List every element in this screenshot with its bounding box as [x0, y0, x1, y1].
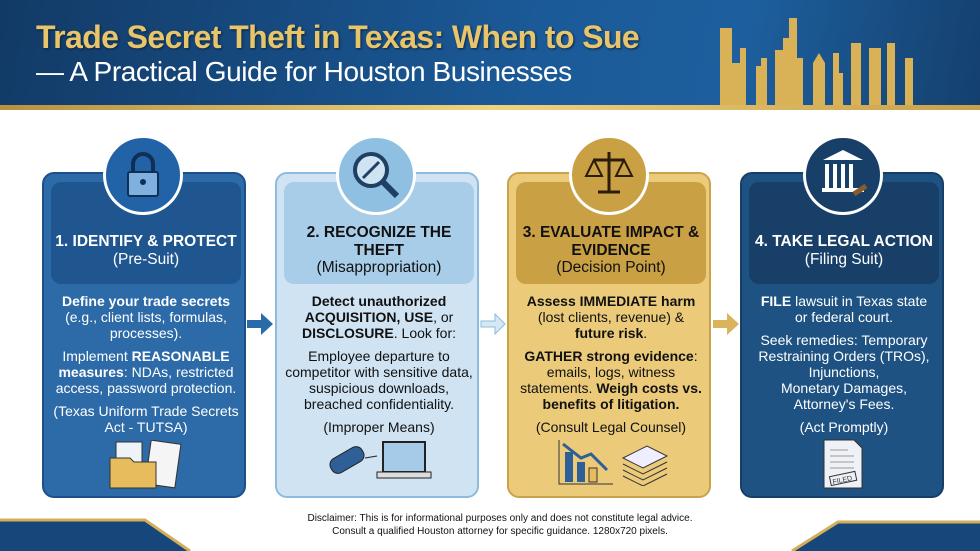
step 2 heading: (Misappropriation) [317, 259, 441, 276]
panel: step 1 [42, 172, 246, 498]
step 4 heading [749, 182, 939, 284]
step 1 text [53, 293, 239, 435]
bottom decorations [0, 518, 980, 551]
icon: padlock circle [103, 135, 183, 215]
step 2 text: Employee departure to competitor with sensitive data, suspicious downloads, breached confidentiality. [285, 348, 473, 412]
step 1 heading: (Pre-Suit) [113, 250, 179, 268]
step 1 heading: 1. IDENTIFY & PROTECT [55, 233, 237, 250]
panel: step 4 [740, 172, 944, 498]
icon: filed document: FILED [832, 475, 853, 486]
step 3 heading [516, 182, 706, 284]
step 3 heading: (Decision Point) [556, 259, 666, 276]
disclaimer: Consult a qualified Houston attorney for specific guidance. 1280x720 pixels. [332, 526, 668, 536]
step 4 heading: (Filing Suit) [805, 250, 883, 268]
step 3 text: Assess IMMEDIATE harm [527, 293, 695, 309]
step 1 text: (Texas Uniform Trade Secrets Act - TUTSA) [53, 403, 239, 435]
step 2 heading: 2. RECOGNIZE THE THEFT [307, 224, 451, 258]
panel: step 2 [275, 172, 479, 498]
step 4 text: Seek remedies: Temporary Restraining Orders (TROs), Injunctions, [758, 332, 930, 380]
step 1 heading [51, 182, 241, 284]
icon: courthouse gavel circle [803, 135, 883, 215]
icon: usb and laptop [330, 441, 432, 478]
disclaimer [307, 513, 692, 536]
step 1 text: Define your trade secrets [62, 293, 230, 309]
step 3 text: (lost clients, revenue) & future risk. [538, 309, 684, 341]
icon: chart and papers [558, 440, 668, 486]
step 2 text: Detect unauthorized ACQUISITION, USE, or DISCLOSURE. Look for: [302, 293, 456, 341]
step 3 text: GATHER strong evidence: emails, logs, witness statements. Weigh costs vs. benefits of litigation. [520, 348, 702, 412]
step 1 text: (e.g., client lists, formulas, processes). [65, 309, 227, 341]
step 3 text [520, 293, 702, 435]
arrow 2 [480, 313, 506, 335]
step 4 heading: 4. TAKE LEGAL ACTION [755, 233, 933, 250]
step 4 text [758, 293, 930, 435]
skyline [720, 18, 913, 105]
subtitle: — A Practical Guide for Houston Businesses [36, 56, 572, 87]
step 4 text: (Act Promptly) [800, 419, 888, 435]
arrow 1 [247, 313, 273, 335]
step 2 text: (Improper Means) [323, 419, 435, 435]
title: Trade Secret Theft in Texas: When to Sue [36, 19, 639, 55]
header banner [0, 0, 980, 108]
step 4 text: FILE lawsuit in Texas state or federal court. [761, 293, 927, 325]
panel: step 3 [507, 172, 711, 498]
icon: filed document [824, 440, 862, 488]
icon: broken chain magnifier circle [336, 135, 416, 215]
step 1 text: Implement REASONABLE measures: NDAs, restricted access, password protection. [56, 348, 236, 396]
step 4 text: Attorney's Fees. [794, 396, 894, 412]
icon: scales circle [569, 135, 649, 215]
step 3 heading: 3. EVALUATE IMPACT & EVIDENCE [523, 224, 699, 258]
step 2 text [285, 293, 473, 435]
step 3 text: (Consult Legal Counsel) [536, 419, 686, 435]
step 2 heading [284, 182, 474, 284]
disclaimer: Disclaimer: This is for informational purposes only and does not constitute legal advice. [307, 513, 692, 524]
icon: folder and contract [110, 440, 182, 488]
arrow 3 [713, 313, 739, 335]
step 4 text: Monetary Damages, [781, 380, 907, 396]
